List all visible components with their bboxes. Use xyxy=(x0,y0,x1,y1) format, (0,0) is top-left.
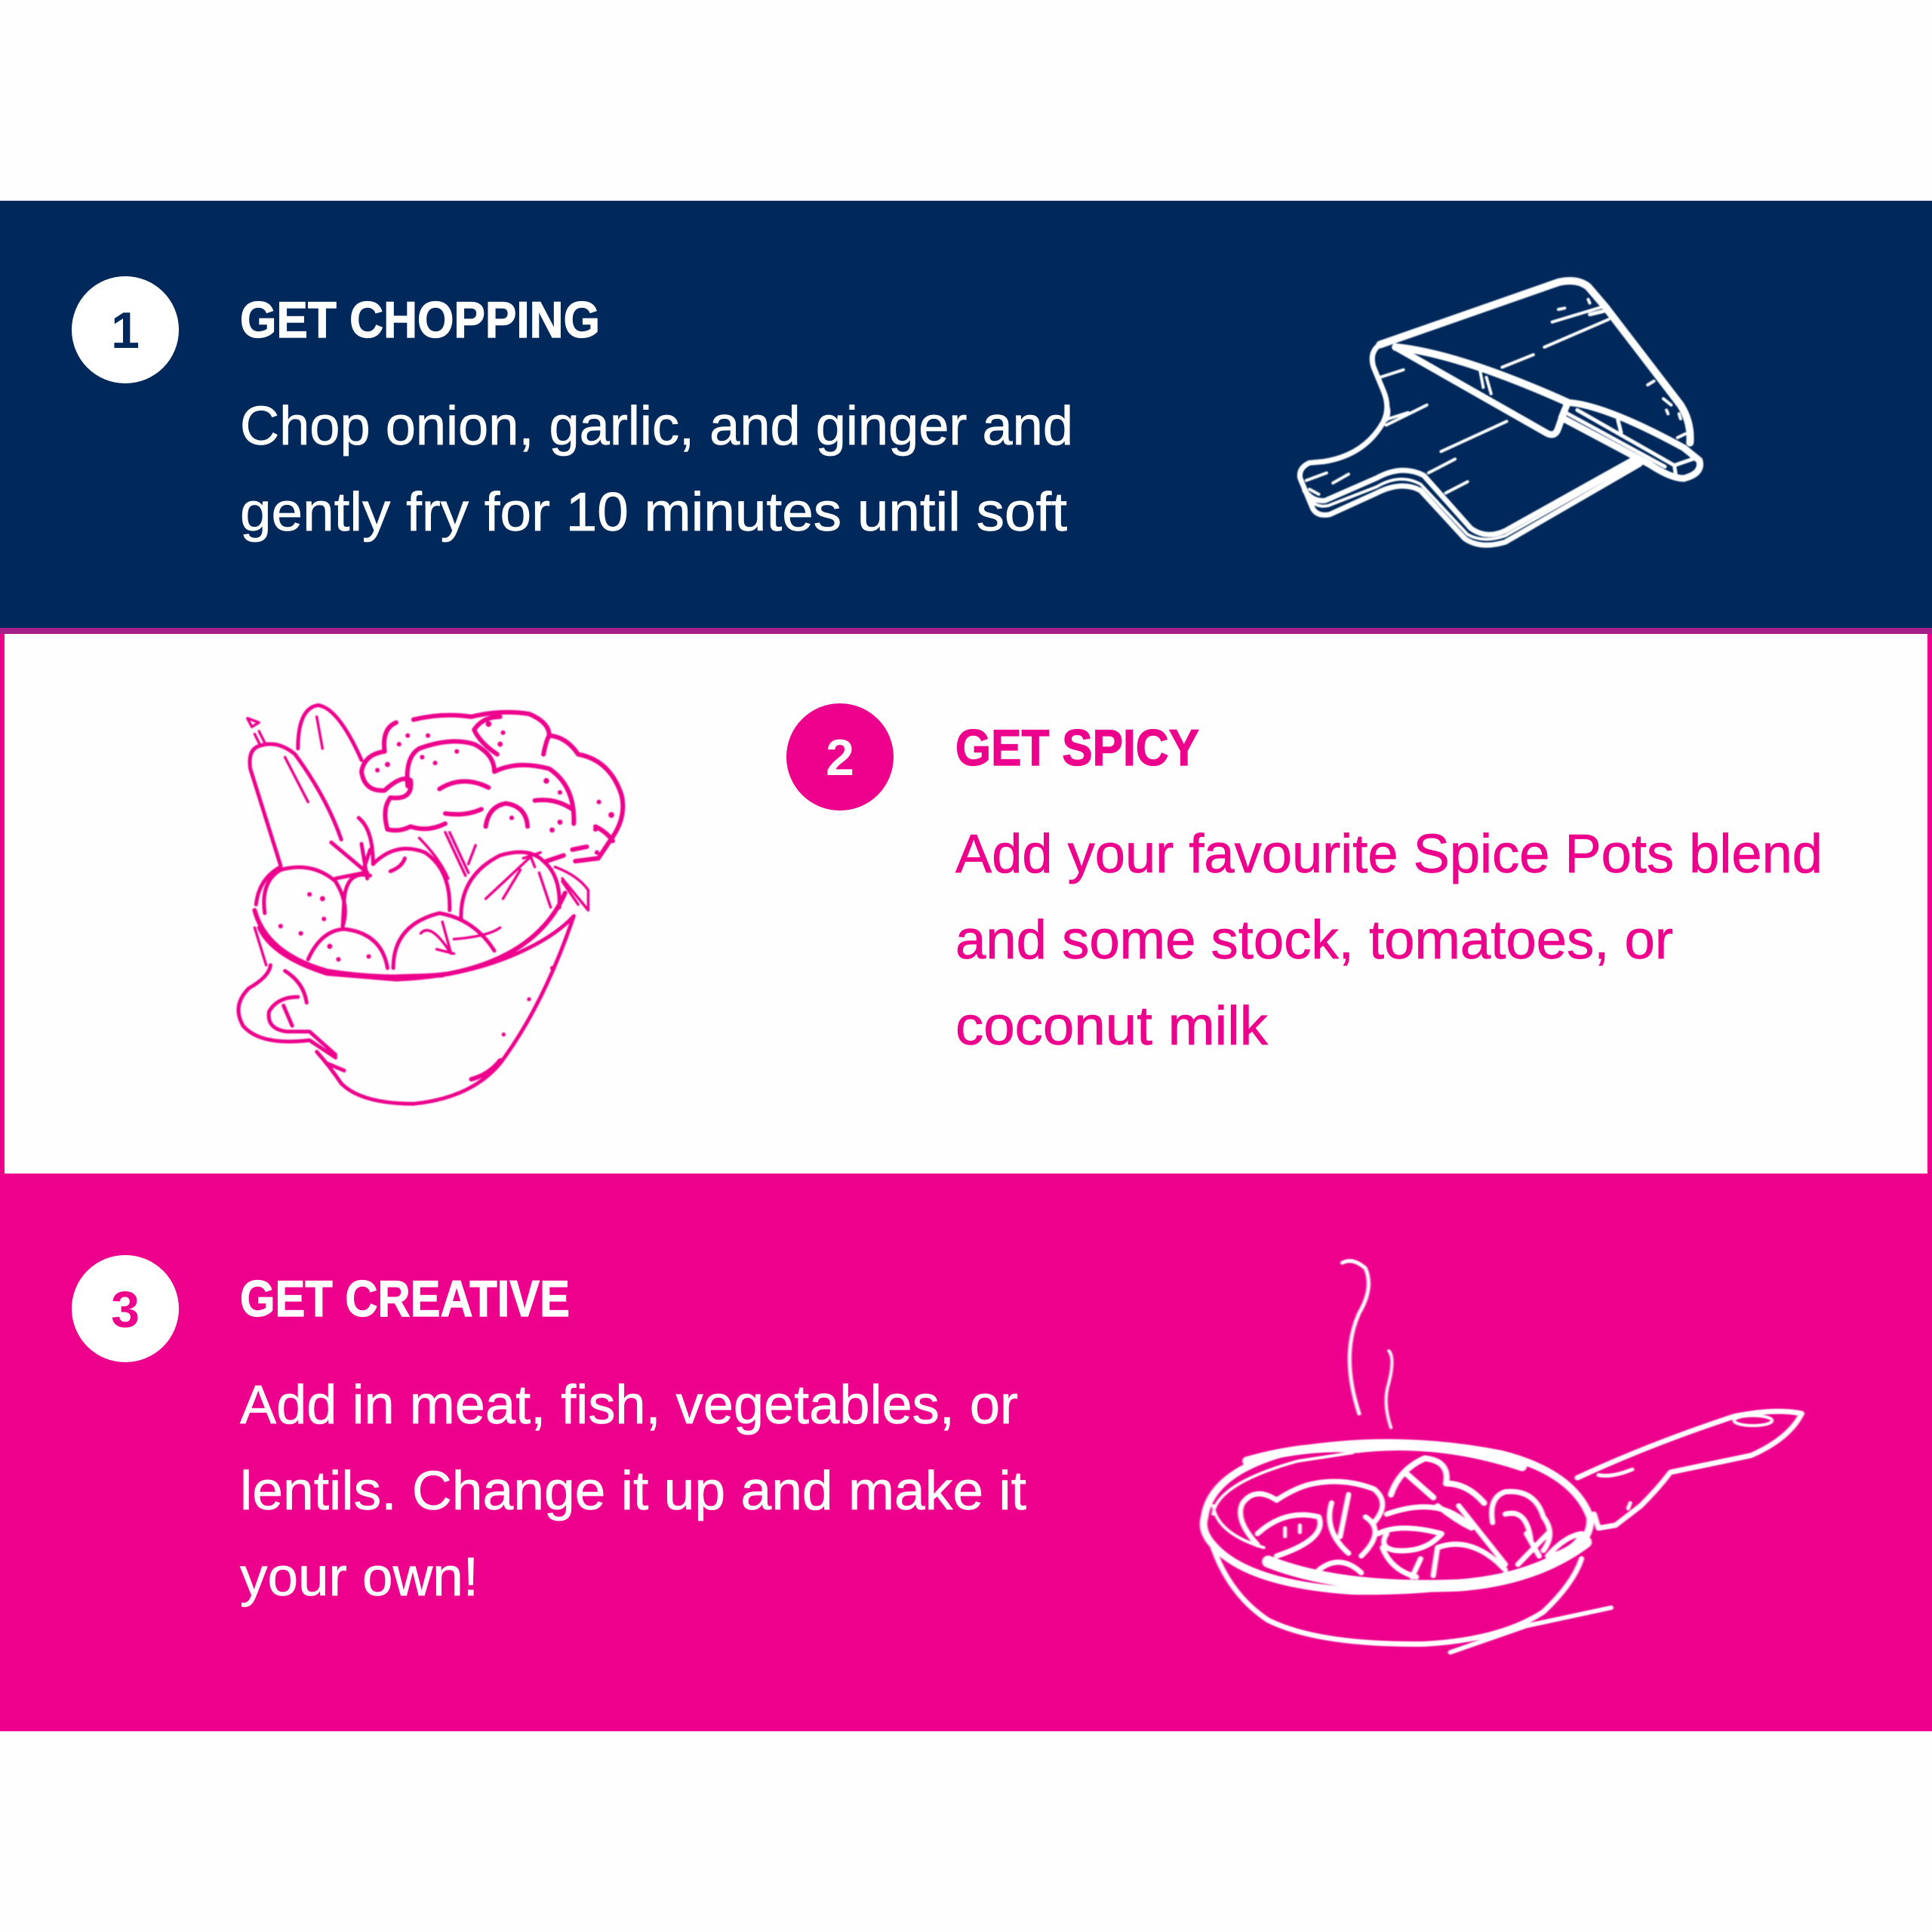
icon: chopping board and knife xyxy=(1300,281,1700,545)
heading: get creative: GET CREATIVE xyxy=(240,1270,570,1327)
text block: step 2 instructions xyxy=(955,824,1823,1057)
text block: step 1 instructions: gently fry for 10 minutes until soft xyxy=(240,482,1067,543)
text block: step 2 instructions: and some stock, tomatoes, or xyxy=(955,910,1673,971)
text block: step 3 instructions: lentils. Change it up and make it xyxy=(240,1461,1026,1521)
number badge 1 xyxy=(72,276,179,383)
text block: step 2 instructions: coconut milk xyxy=(955,996,1269,1057)
icon: frying pan with steam xyxy=(1204,1261,1801,1652)
panel: step 1 get chopping xyxy=(0,201,1932,629)
heading: get chopping: GET CHOPPING xyxy=(240,291,600,349)
text block: step 3 instructions: Add in meat, fish, vegetables, or xyxy=(240,1375,1018,1435)
heading: get spicy: GET SPICY xyxy=(955,719,1199,777)
number badge 3: 3 xyxy=(111,1281,140,1338)
text block: step 3 instructions xyxy=(240,1375,1026,1607)
number badge 3 xyxy=(72,1255,179,1362)
number badge 1: 1 xyxy=(111,302,140,359)
text block: step 1 instructions xyxy=(240,396,1073,543)
text block: step 1 instructions: Chop onion, garlic, and ginger and xyxy=(240,396,1073,457)
text block: step 3 instructions: your own! xyxy=(240,1547,478,1607)
panel: step 2 get spicy xyxy=(0,628,1932,1176)
number badge 2 xyxy=(786,703,894,811)
panel: step 3 get creative xyxy=(0,1174,1932,1731)
number badge 2: 2 xyxy=(826,729,854,786)
text block: step 2 instructions: Add your favourite Spice Pots blend xyxy=(955,824,1823,884)
icon: bowl of vegetables xyxy=(238,705,623,1104)
